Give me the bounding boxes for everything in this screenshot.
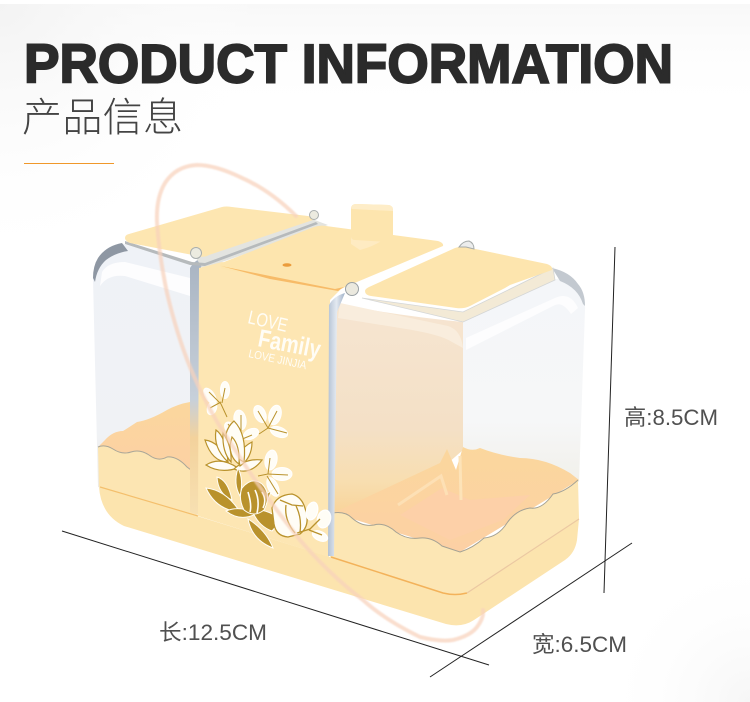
right glass edge xyxy=(328,293,345,556)
dimension line: length xyxy=(62,531,489,665)
white lotus xyxy=(205,421,262,471)
product: seasoning box xyxy=(93,204,585,625)
floral decoration xyxy=(201,382,333,548)
dimension line: height xyxy=(604,247,615,593)
right inner floor xyxy=(333,447,579,552)
label: height: 高:8.5CM xyxy=(624,405,718,430)
left lid xyxy=(125,206,318,266)
left inner floor xyxy=(98,402,198,473)
center lid hole xyxy=(282,263,292,267)
gold lotus xyxy=(206,468,282,548)
orange ring xyxy=(157,165,483,641)
center label panel xyxy=(198,262,340,557)
right peach face xyxy=(333,304,463,513)
center rim xyxy=(196,219,328,272)
flower cluster 4 xyxy=(258,449,292,498)
brand text: love family xyxy=(246,307,323,372)
left glass edge xyxy=(190,258,205,515)
brand text: love family: LOVE xyxy=(246,307,290,337)
center lid xyxy=(220,226,443,291)
left container xyxy=(93,243,205,516)
flower cluster 3 xyxy=(222,409,260,442)
flower bud xyxy=(272,494,333,543)
label: width: 宽:6.5CM xyxy=(532,632,627,657)
right lid xyxy=(346,241,555,322)
left glass body xyxy=(93,244,198,515)
subtitle: chinese heading: 产品信息 xyxy=(22,85,183,143)
right wave front xyxy=(330,480,579,594)
left wave front xyxy=(98,446,197,515)
flower cluster 1 xyxy=(201,382,230,417)
right tray seam xyxy=(331,557,467,594)
right lid hinges xyxy=(346,282,358,296)
left tray seam xyxy=(100,487,198,516)
right container xyxy=(328,268,585,594)
base tray xyxy=(99,487,579,625)
knob handle xyxy=(351,204,393,250)
brand text: love family: LOVE JINJIA xyxy=(247,348,308,372)
left lid hinges xyxy=(190,248,202,258)
brand text: love family: Family xyxy=(256,324,323,364)
title: product information: PRODUCT INFORMATION xyxy=(24,32,673,94)
label: length: 长:12.5CM xyxy=(159,620,267,645)
dimension line: width xyxy=(430,543,632,677)
flower cluster 2 xyxy=(251,404,289,440)
right glass face xyxy=(463,279,585,482)
accent rule xyxy=(24,163,114,164)
